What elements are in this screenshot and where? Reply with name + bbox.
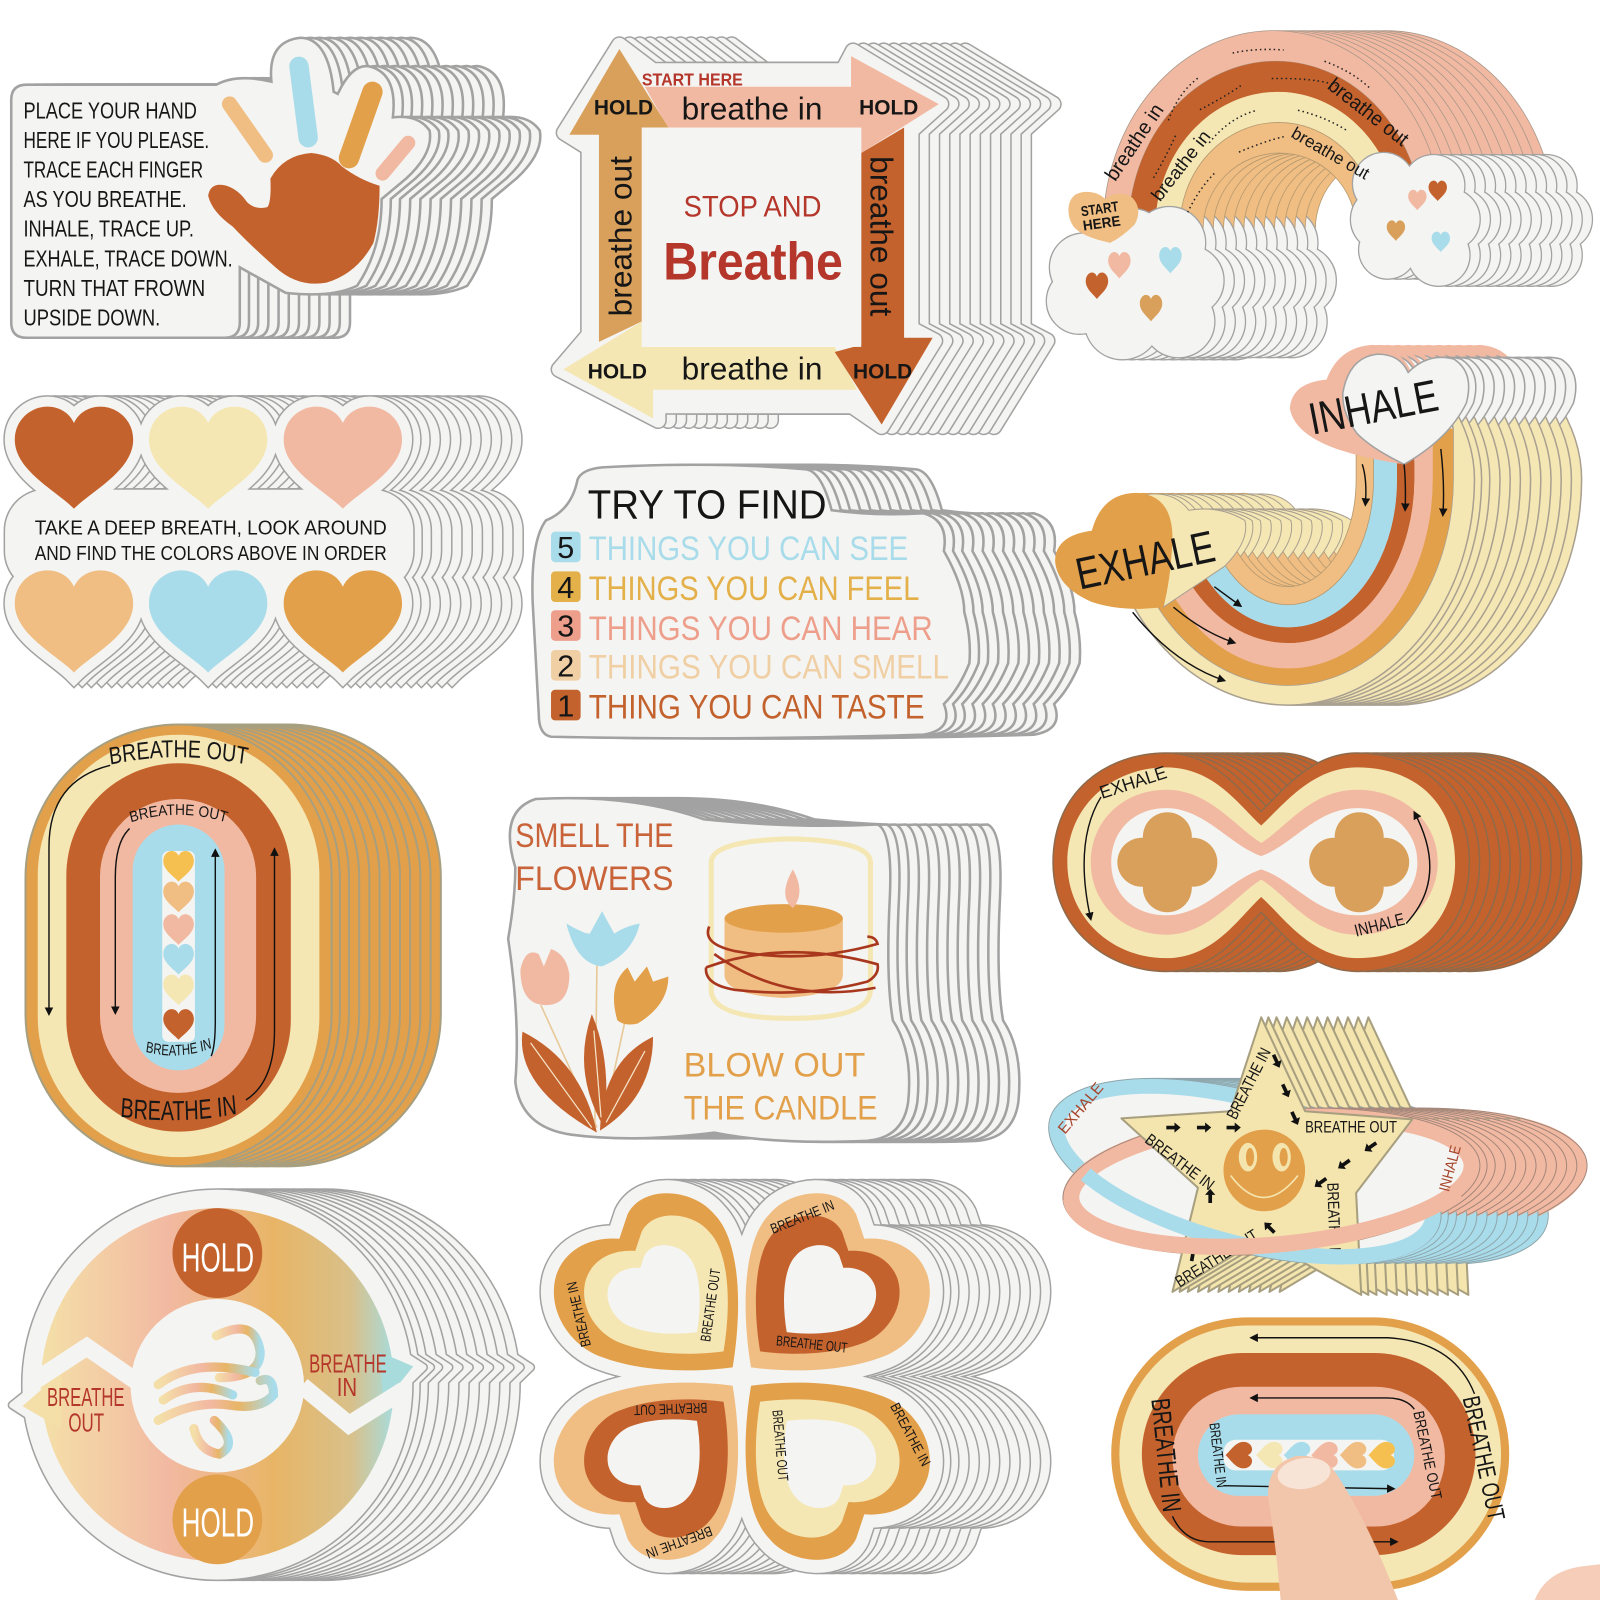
clover labels: BREATHE IN [768, 1198, 837, 1238]
oval label: inner breathe out: BREATHE OUT [130, 804, 228, 822]
oval label: outer breathe out: BREATHE OUT [109, 740, 249, 764]
oval label: outer breathe in [122, 1095, 236, 1120]
list rows: THINGS YOU CAN SEE [589, 530, 908, 568]
star labels: BREATHE IN [1142, 1131, 1218, 1194]
infinity arrows and labels: EXHALE [1097, 761, 1169, 803]
arrow labels: HOLD [853, 360, 912, 384]
candle heading: THE CANDLE [684, 1089, 878, 1127]
star labels: BREATHE IN [1223, 1045, 1275, 1122]
clover labels: BREATHE IN [644, 1522, 714, 1561]
cloud hearts [1086, 181, 1450, 321]
sticker stack: try to find list [532, 465, 1080, 738]
number chips [551, 531, 581, 723]
flowers heading [515, 817, 673, 898]
arrow labels: Breathe [663, 233, 843, 292]
infinity arrows and labels: INHALE [1352, 909, 1407, 941]
number chips: 2 [557, 650, 574, 684]
star labels [1142, 1045, 1397, 1291]
breathe labels: IN [337, 1374, 357, 1402]
instruction text: UPSIDE DOWN. [23, 305, 160, 331]
flowers heading: SMELL THE [515, 817, 673, 855]
arrow labels: breathe out [603, 156, 639, 316]
breathe labels [47, 1350, 387, 1438]
hold circles: HOLD [182, 1234, 254, 1280]
sticker stack: square breathing arrows [559, 45, 1053, 427]
number chips: 1 [557, 689, 574, 723]
rainbow labels: breathe out [1288, 123, 1373, 183]
wind swirl [158, 1329, 273, 1454]
sticker stack: infinity loop [1053, 753, 1582, 971]
breathe labels: BREATHE [47, 1384, 124, 1412]
heart: bottom left [554, 1383, 738, 1560]
arrow labels: STOP AND [684, 190, 821, 223]
hold circles [172, 1208, 262, 1564]
arrow labels: breathe out [863, 156, 899, 317]
sticker stack: inhale exhale rainbow [1055, 345, 1582, 705]
infinity arrows and labels [1084, 761, 1430, 941]
sticker: horizontal rainbow oval [1111, 1317, 1509, 1600]
arrow labels: HOLD [859, 95, 918, 119]
clover labels: BREATHE OUT [698, 1268, 724, 1343]
arrow labels: HOLD [594, 95, 653, 119]
oval label: outer breathe in: BREATHE IN [122, 1095, 236, 1120]
clover labels [564, 1198, 933, 1561]
ring labels: EXHALE [1055, 1080, 1107, 1137]
oval arrows [1172, 1338, 1474, 1542]
arrow labels: breathe in [682, 90, 822, 126]
arrow labels: START HERE [642, 70, 743, 90]
smiley face [1223, 1130, 1305, 1211]
start here heart: HERE [1082, 213, 1122, 235]
heart: top left [554, 1193, 738, 1370]
pointing finger [1268, 1455, 1398, 1600]
second fingertip at corner [1535, 1564, 1600, 1600]
sticker stack: hold circle [12, 1193, 531, 1577]
clover labels: BREATHE IN [886, 1400, 933, 1469]
instruction text: HERE IF YOU PLEASE. [23, 127, 209, 153]
oval labels: BREATHE OUT [1457, 1394, 1509, 1523]
star labels: BREATHE OUT [1305, 1119, 1397, 1137]
heart: bottom right [746, 1383, 930, 1560]
hold circles: HOLD [182, 1500, 254, 1546]
number chips: 3 [557, 610, 574, 644]
flowers heading: FLOWERS [515, 860, 673, 898]
rainbow labels: breathe out [1323, 74, 1413, 151]
candle heading [684, 1047, 878, 1127]
sticker stack: colour hearts [15, 407, 512, 672]
sticker stack: rainbow with clouds [1047, 31, 1592, 359]
sticker stack: hand tracing card [11, 38, 540, 338]
candle illustration [706, 839, 878, 1018]
exhale label: EXHALE [1071, 520, 1219, 600]
sticker stack: four heart clover [554, 1193, 1037, 1561]
rainbow labels: breathe in [1101, 100, 1168, 185]
clover labels: BREATHE OUT [633, 1399, 708, 1417]
hearts instruction text: AND FIND THE COLORS ABOVE IN ORDER [35, 543, 387, 565]
list rows: THINGS YOU CAN HEAR [589, 610, 933, 648]
rainbow dotted arrows [1153, 49, 1369, 212]
arrow labels: HOLD [588, 360, 647, 384]
number chips: 5 [557, 531, 574, 565]
clover labels: BREATHE OUT [768, 1409, 791, 1482]
arrow labels [588, 70, 918, 387]
instruction text: EXHALE, TRACE DOWN. [23, 245, 233, 271]
heart column [163, 851, 194, 1040]
ring labels [1055, 1080, 1465, 1193]
title: TRY TO FIND [588, 481, 827, 527]
clover labels: BREATHE OUT [775, 1333, 848, 1357]
sticker stack: vertical rainbow oval [24, 724, 442, 1168]
star labels: BREATHE IN [1323, 1182, 1344, 1260]
rainbow labels: breathe in [1147, 126, 1215, 205]
oval labels [1145, 1394, 1509, 1523]
oval labels: BREATHE IN [1145, 1397, 1187, 1514]
oval labels: BREATHE IN [1205, 1422, 1229, 1489]
oval label: outer breathe out [109, 740, 249, 764]
start here heart [1068, 192, 1138, 243]
instruction text: PLACE YOUR HAND [23, 97, 197, 123]
flowers illustration [520, 911, 668, 1133]
number chips: 4 [557, 571, 574, 605]
heart row [1226, 1442, 1395, 1468]
ring labels: INHALE [1436, 1144, 1465, 1193]
heart: top right [746, 1193, 930, 1370]
instruction text: TRACE EACH FINGER [23, 157, 203, 183]
oval arrows [49, 765, 274, 1100]
list rows [589, 530, 949, 726]
instruction text: AS YOU BREATHE. [23, 186, 187, 212]
sticker stack: flowers and candle [508, 798, 1019, 1142]
oval labels: BREATHE OUT [1409, 1410, 1445, 1501]
arrow labels: breathe in [682, 351, 822, 387]
clover icon: right [1309, 812, 1409, 912]
list rows: THINGS YOU CAN FEEL [589, 570, 919, 608]
inhale label: INHALE [1304, 370, 1442, 445]
candle heading: BLOW OUT [684, 1047, 865, 1085]
breathe labels: BREATHE [309, 1350, 387, 1378]
clover icon: left [1117, 812, 1217, 912]
instruction text: TURN THAT FROWN [23, 275, 205, 301]
list rows: THINGS YOU CAN SMELL [589, 649, 949, 687]
clover labels: BREATHE IN [564, 1280, 595, 1348]
instruction text: INHALE, TRACE UP. [23, 216, 194, 242]
oval label: inner breathe in: BREATHE IN [146, 1038, 211, 1056]
hearts instruction text: TAKE A DEEP BREATH, LOOK AROUND [35, 518, 387, 540]
list rows: THING YOU CAN TASTE [589, 688, 924, 726]
rainbow labels [1101, 74, 1413, 205]
front ring arcs [1071, 1132, 1460, 1291]
star labels: BREATHE OUT [1172, 1226, 1261, 1291]
star arrows [1166, 1053, 1379, 1262]
rainbow flow arrows [1133, 449, 1444, 681]
breathe labels: OUT [68, 1410, 104, 1438]
sticker stack: star with rings [1029, 1017, 1593, 1301]
instruction text [23, 97, 233, 331]
hearts instruction text [35, 518, 387, 565]
start here heart: START [1080, 199, 1120, 220]
